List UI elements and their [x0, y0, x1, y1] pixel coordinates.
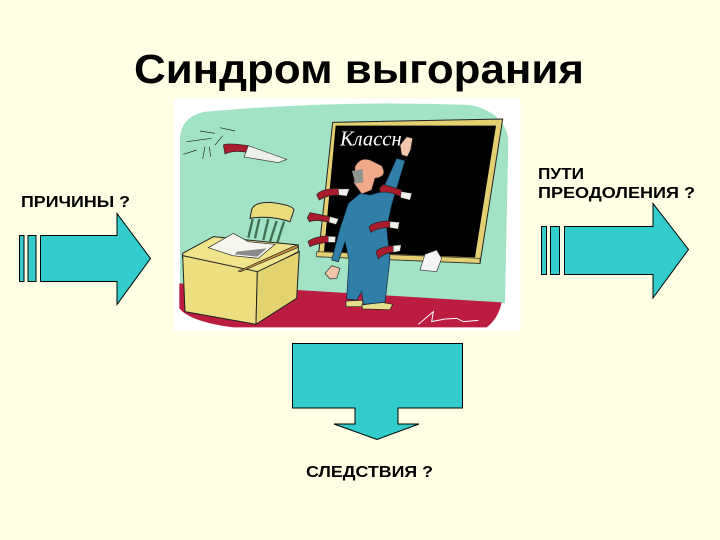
desk: [183, 237, 299, 324]
label: ways to overcome: ПУТИ: [538, 166, 584, 183]
hair: [352, 169, 363, 183]
arrow: causes: [20, 214, 150, 304]
rag: [420, 250, 442, 272]
arrow: ways to overcome: [542, 204, 688, 298]
label: ways to overcome: ПРЕОДОЛЕНИЯ ?: [538, 185, 695, 202]
flying knife: [183, 128, 287, 163]
label: ways to overcome: [538, 166, 695, 202]
teacher: [325, 137, 413, 310]
label: causes: ПРИЧИНЫ ?: [21, 194, 130, 211]
label: consequences: СЛЕДСТВИЯ ?: [306, 464, 433, 481]
wall: [180, 103, 508, 303]
cartoon: teacher at blackboard with knives: [174, 99, 521, 331]
raised hand: [400, 137, 413, 157]
shoes: [346, 300, 363, 307]
knife handles in back: [307, 184, 402, 259]
picture background: [174, 99, 521, 331]
open book: [208, 233, 275, 258]
arrow: consequences: [292, 344, 462, 440]
blackboard: [317, 119, 503, 263]
head: [354, 159, 384, 194]
title: Синдром выгорания: [134, 46, 584, 92]
signature: [418, 312, 478, 324]
board writing: Классн: [339, 129, 402, 151]
floor: [179, 283, 502, 327]
chair: [248, 202, 294, 242]
knife blades in back: [328, 189, 412, 252]
suit: body, arms and legs: [332, 158, 405, 304]
lower hand: [325, 266, 340, 279]
